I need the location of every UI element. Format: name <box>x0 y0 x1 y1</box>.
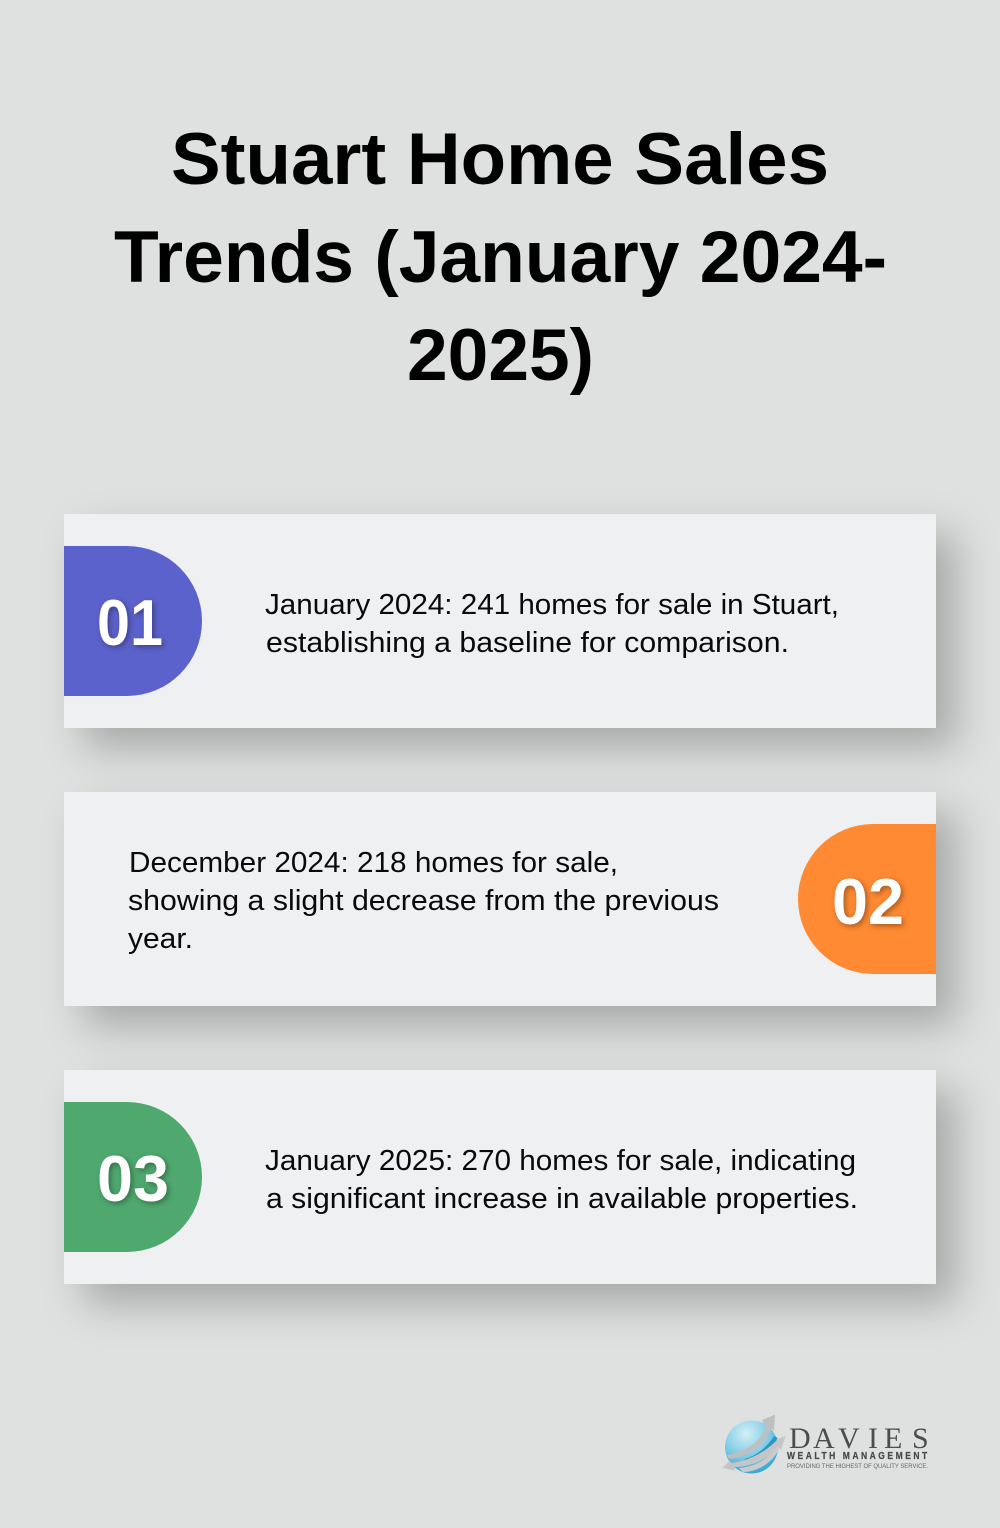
text: January 2025: a significant increase in available properties. <box>266 1183 858 1215</box>
title: 2025) <box>407 315 594 396</box>
badge: 01: 01 <box>97 586 163 659</box>
badge: 02 <box>798 824 936 974</box>
title <box>114 119 887 396</box>
panel: January 2024 <box>64 514 936 728</box>
text: January 2024 <box>265 589 839 659</box>
text: December 2024 <box>128 847 719 955</box>
text: January 2025: January 2025: 270 homes for sale, indicating <box>265 1145 856 1177</box>
panel: December 2024 <box>64 792 936 1006</box>
title: Trends (January 2024- <box>114 217 887 298</box>
badge: 01 <box>64 546 202 696</box>
text: December 2024: year. <box>128 923 193 955</box>
logo subtitle: WEALTH MANAGEMENT <box>787 1450 928 1461</box>
badge: 03: 03 <box>97 1142 169 1215</box>
text: December 2024: showing a slight decrease from the previous <box>128 885 719 917</box>
logo name: DAVIES <box>789 1422 929 1455</box>
logo tagline: PROVIDING THE HIGHEST OF QUALITY SERVICE. <box>787 1463 928 1470</box>
logo: Davies Wealth Management <box>722 1414 929 1474</box>
icon: globe with arrows <box>722 1414 786 1474</box>
panel: January 2025 <box>64 1070 936 1284</box>
text: January 2025 <box>265 1145 858 1215</box>
badge: 02: 02 <box>832 865 904 938</box>
badge: 03 <box>64 1102 202 1252</box>
text: January 2024: establishing a baseline for comparison. <box>266 627 789 659</box>
title: Stuart Home Sales <box>171 119 829 200</box>
text: January 2024: January 2024: 241 homes for sale in Stuart, <box>265 589 839 621</box>
text: December 2024: December 2024: 218 homes for sale, <box>129 847 618 879</box>
